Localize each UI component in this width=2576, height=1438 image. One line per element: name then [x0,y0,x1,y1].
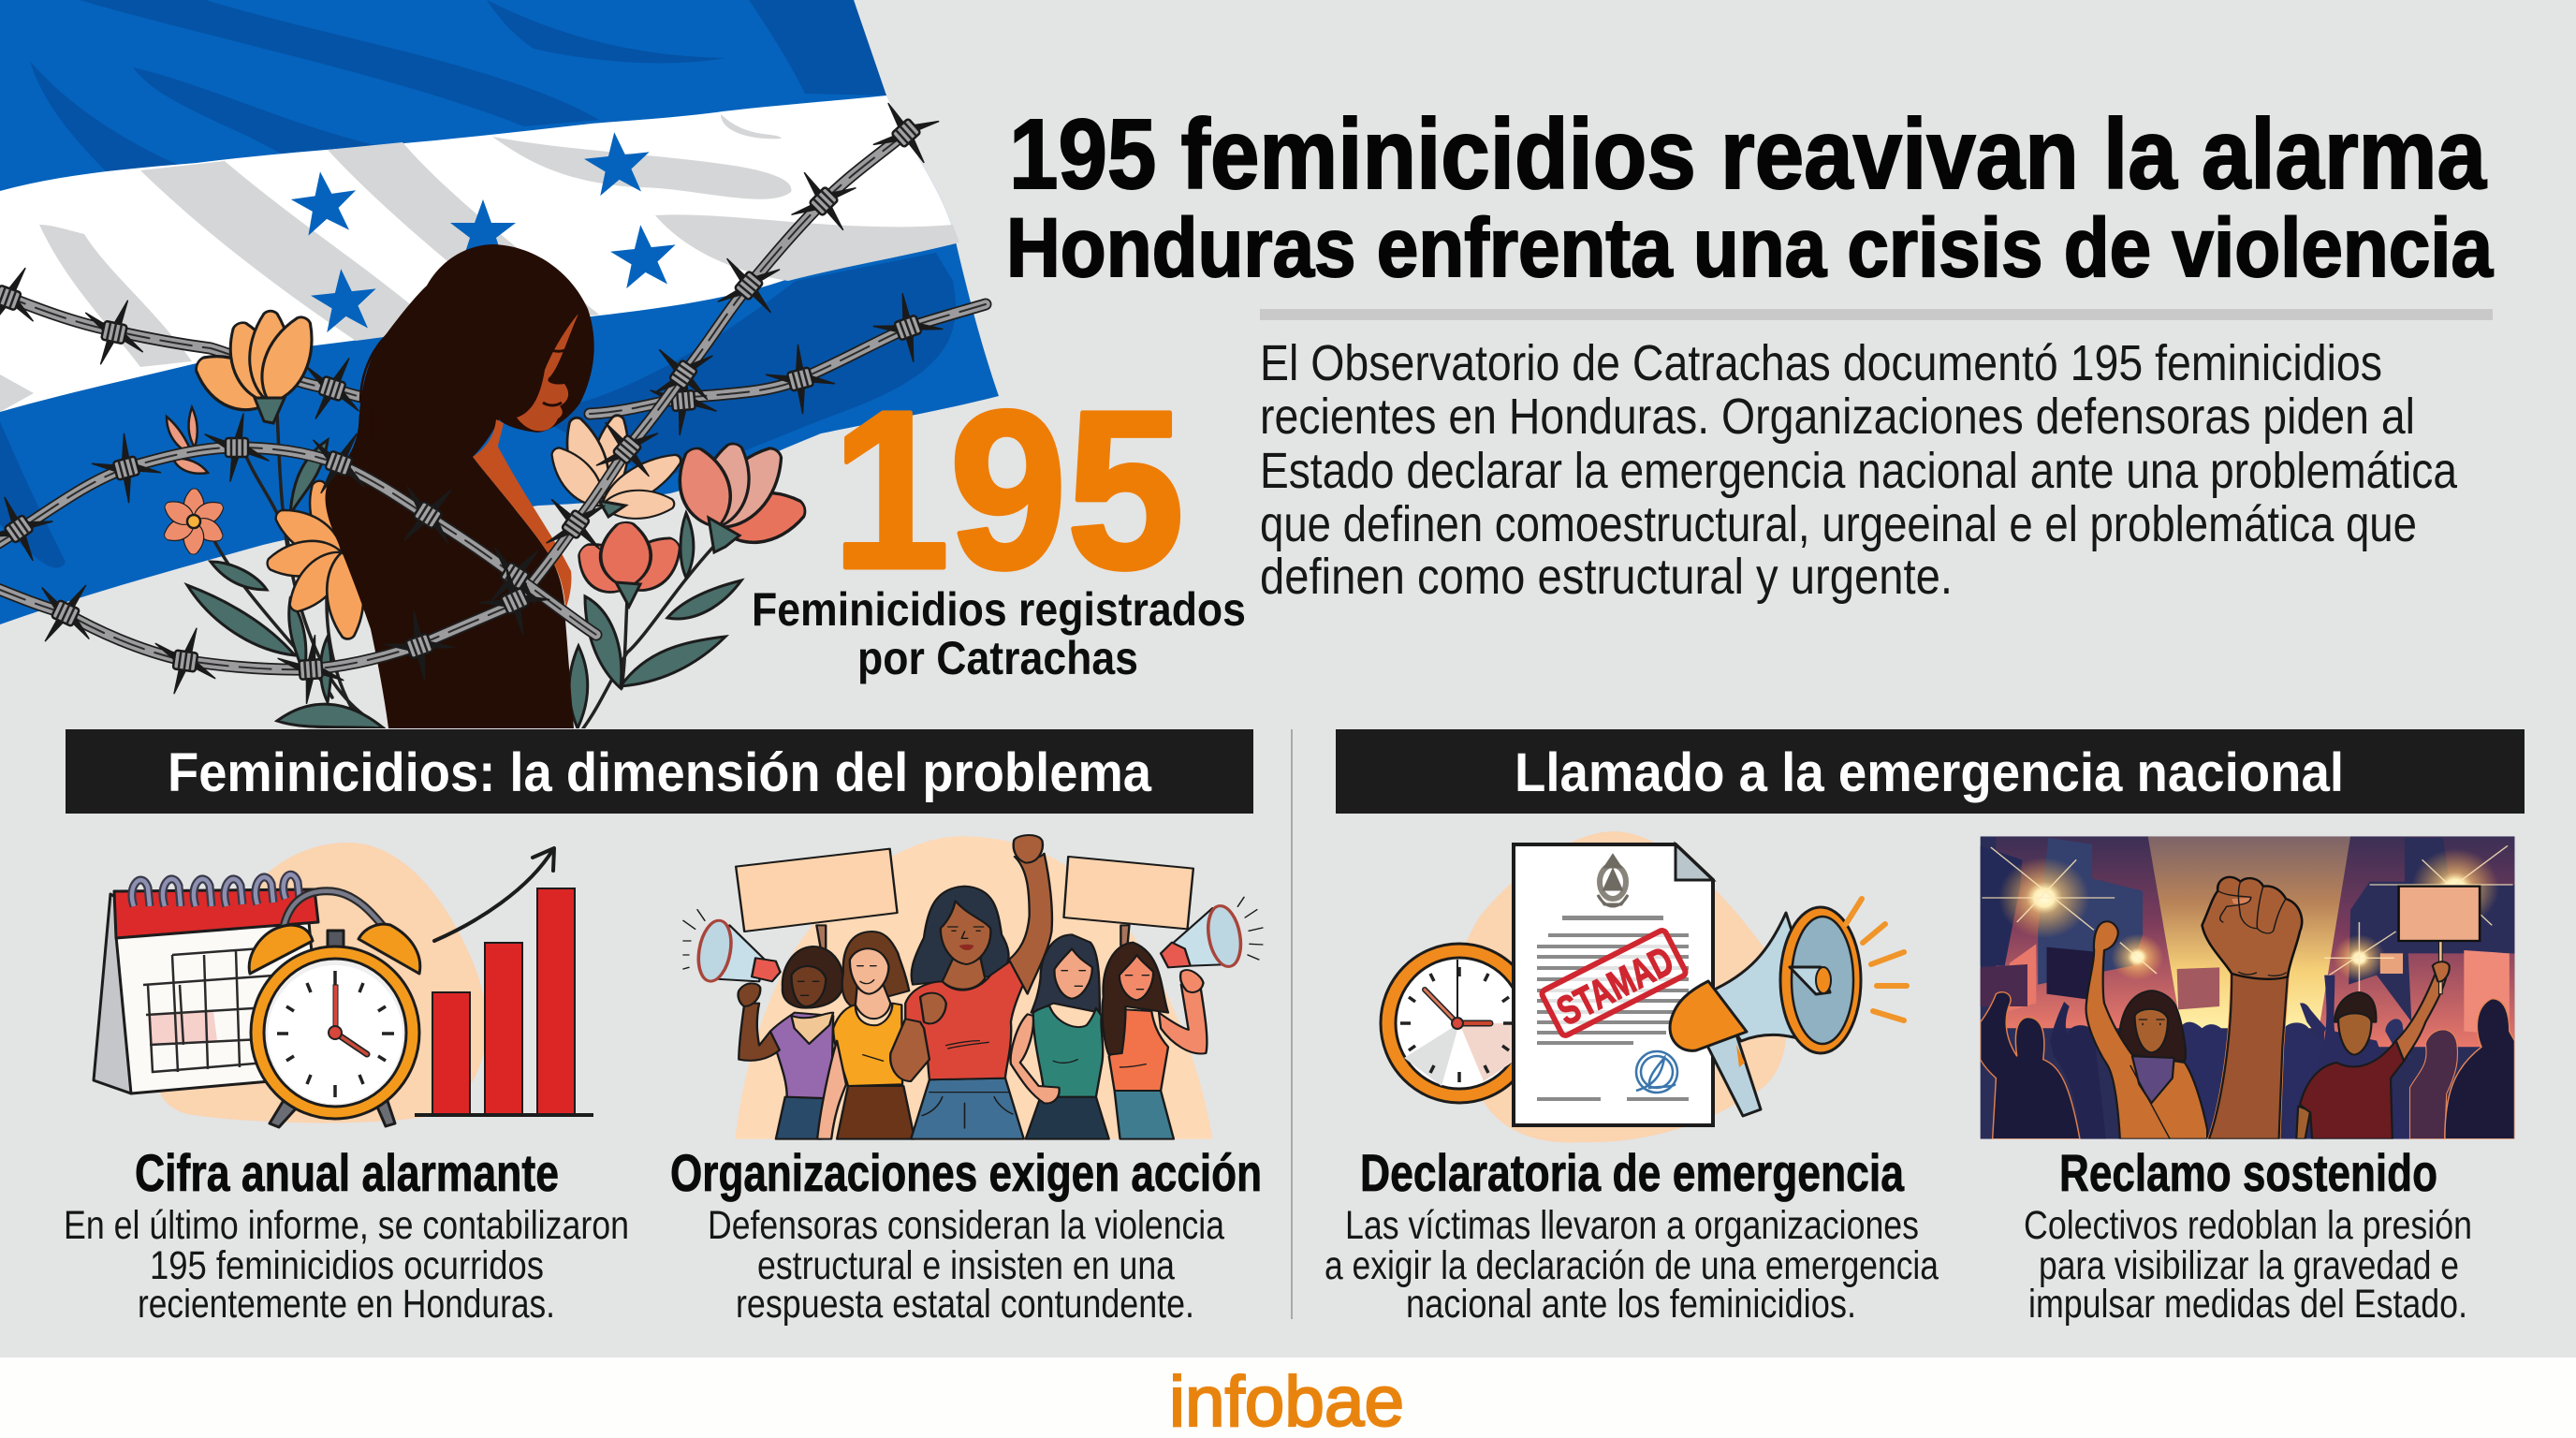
scene: raised fist at a protest [1981,836,2514,1139]
woman teal [1011,934,1109,1139]
silhouette of a woman [326,244,594,728]
card text: organizaciones: estructural e insisten en una [757,1243,1175,1288]
calendar [94,874,323,1093]
woman centre [890,835,1052,1139]
title [1006,99,2494,294]
rays [1846,899,1907,1020]
card text: declaratoria: a exigir la declaración de una emergencia [1325,1243,1939,1288]
card text: organizaciones: Defensoras consideran la violencia [708,1203,1224,1248]
card text: cifra anual [64,1143,629,1327]
footer band [0,1357,2576,1438]
card text: reclamo: Reclamo sostenido [2059,1143,2437,1202]
section header: la dimensión del problema [66,729,1253,814]
megaphone right [1161,897,1263,992]
arrow [434,848,554,941]
big number caption: Feminicidios registrados [752,583,1246,636]
night sky [1981,836,2514,1139]
intro text: definen como estructural y urgente. [1260,549,1953,605]
intro text [1260,335,2458,605]
stars [287,129,680,333]
card text: reclamo [2024,1143,2472,1327]
intro text: El Observatorio de Catrachas documentó 195 feminicidios [1260,335,2382,391]
card text: cifra anual: Cifra anual alarmante [135,1143,559,1202]
intro text: recientes en Honduras. Organizaciones defensoras piden al [1260,389,2415,445]
section header: la dimensión del problema: Feminicidios: la dimensión del problema [168,742,1152,803]
big number 195: 195 [832,364,1184,615]
front barbed wire [0,86,952,705]
woman yellow [817,932,915,1139]
hero illustration: flag, woman, barbed wire and flowers [0,0,999,728]
bars [432,888,575,1116]
glow backdrop [2148,836,2350,1028]
card text: cifra anual: 195 feminicidios ocurridos [150,1243,544,1288]
big number caption: por Catrachas [857,632,1138,684]
flower: orange top [195,309,314,425]
face [517,314,578,431]
woman coral [1102,943,1207,1139]
megaphone [1670,907,1861,1116]
flower: peach [550,414,681,520]
back barbed wire [0,256,986,437]
lights [1982,845,2513,994]
card text: organizaciones [670,1143,1262,1327]
icon: decree, clock and megaphone [1381,831,1907,1142]
icon: calendar, alarm clock and rising bars [94,843,593,1127]
flag of Honduras [0,0,999,624]
card text: reclamo: Colectivos redoblan la presión [2024,1203,2472,1248]
stamp [1541,929,1688,1038]
card text: cifra anual: recientemente en Honduras. [138,1282,555,1327]
neck and chest [473,419,571,609]
alarm clock [249,891,420,1127]
placards [736,849,1193,950]
peach backdrop [735,836,1212,1139]
section divider [1291,729,1293,1319]
card text: declaratoria: Las víctimas llevaron a organizaciones [1345,1203,1919,1248]
flower: salmon large [678,442,807,554]
flower: small salmon [160,407,227,554]
card text: cifra anual: En el último informe, se contabilizaron [64,1203,629,1248]
card text: organizaciones: Organizaciones exigen acción [670,1143,1262,1202]
title rule [1260,309,2493,320]
megaphone left [683,910,781,983]
emblem [1598,856,1628,906]
buildings [1981,836,2514,1047]
card text: declaratoria [1325,1143,1939,1327]
flower: orange behind figure [265,476,367,640]
woman purple [739,946,843,1139]
card text: organizaciones: respuesta estatal contundente. [736,1282,1194,1327]
card text: reclamo: impulsar medidas del Estado. [2028,1282,2467,1327]
peach blob [1453,831,1787,1142]
stamp: STAMAD [1550,938,1681,1034]
clock [1381,944,1538,1103]
man protester [2296,887,2480,1139]
section header: llamado a la emergencia: Llamado a la emergencia nacional [1515,742,2344,803]
flower: salmon small [578,521,680,610]
card text: declaratoria: nacional ante los feminicidios. [1406,1282,1856,1327]
woman protester [2086,921,2207,1139]
peach blob [157,843,487,1123]
placards in background [1981,947,2219,1009]
card text: reclamo: para visibilizar la gravedad e [2039,1243,2459,1288]
document [1514,844,1713,1125]
big number caption [752,583,1246,684]
icon: women protesting [683,835,1263,1139]
section header: llamado a la emergencia [1336,729,2525,814]
raised fist [2203,877,2302,1139]
card text: declaratoria: Declaratoria de emergencia [1360,1143,1905,1202]
seal [1636,1051,1677,1093]
crowd silhouettes [1981,976,2514,1139]
stems and leaves [187,412,741,728]
